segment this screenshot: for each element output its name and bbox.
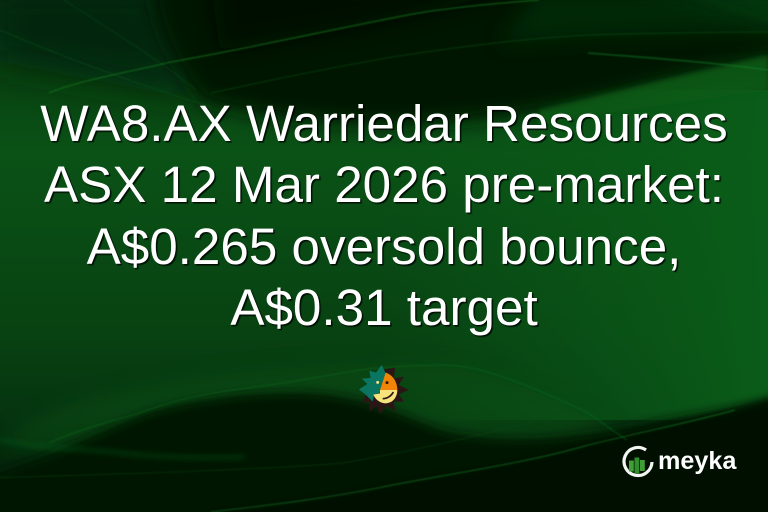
- title: [40, 95, 728, 338]
- icon: mascot sun face: [359, 365, 408, 414]
- logo: meyka: [622, 446, 737, 478]
- icon: meyka ring with bars: [622, 446, 654, 478]
- title: A$0.31 target: [230, 279, 538, 336]
- icon part: smile: [383, 392, 393, 399]
- icon part: orange forehead: [380, 373, 397, 390]
- icon part: dark spiky rays: [362, 368, 409, 414]
- title: A$0.265 oversold bounce,: [87, 218, 681, 275]
- title: ASX 12 Mar 2026 pre-market:: [44, 156, 724, 213]
- icon part: right eye: [386, 381, 388, 384]
- logo wordmark: meyka: [658, 447, 736, 475]
- title: WA8.AX Warriedar Resources: [40, 95, 728, 152]
- icon part: teal spiky half: [359, 365, 386, 402]
- icon part: left eye: [376, 381, 379, 384]
- icon part: yellow face: [373, 390, 397, 403]
